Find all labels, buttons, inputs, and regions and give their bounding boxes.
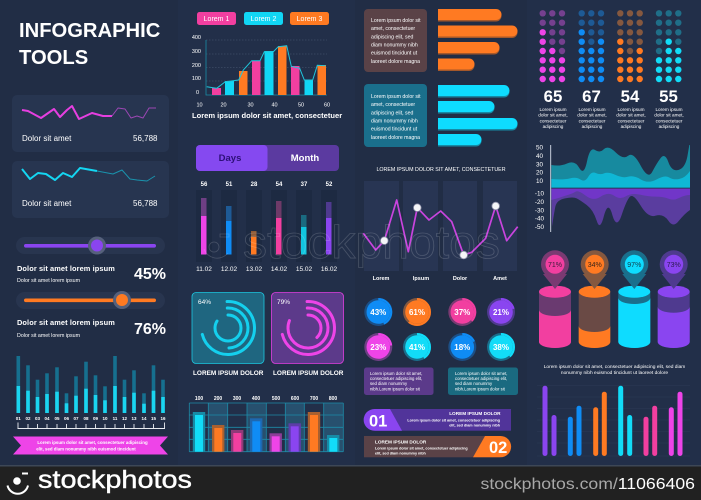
text box: brown: Lorem ipsum dolor sit [371, 18, 421, 24]
circle: 61%: 61% [409, 308, 425, 317]
statistic captions: adipiscing [659, 124, 680, 129]
chart: column chart with line [192, 35, 342, 120]
banner: 02 [364, 436, 511, 457]
chart: grid bar chart: 400 [252, 396, 260, 402]
cylinder: pink 71% [539, 250, 571, 348]
chart: grid bar chart: 600 [291, 396, 299, 402]
chart: daily progress bars: 16.02 [321, 266, 338, 273]
icon: stock logo [8, 472, 28, 494]
chart: mirrored stream areas: 20 [536, 170, 543, 176]
chart: cyan stacked bars: 07 [73, 416, 79, 421]
slider: purple 45%: Dolor sit amet lorem ipsum [17, 278, 81, 284]
circle: 21%: 21% [493, 308, 509, 317]
statistic numbers: 54 [621, 87, 640, 106]
chart: grid bar chart: 800 [329, 396, 337, 402]
panel: magenta sparkline card: 56,788 [133, 134, 158, 143]
chart: mirrored stream areas: -20 [535, 199, 544, 206]
panel: cyan sparkline card: 56,788 [133, 199, 158, 208]
chart: cyan stacked bars [16, 356, 166, 428]
chart: mirrored stream areas: 30 [536, 162, 543, 168]
statistic captions: dolor sit amet, [538, 113, 568, 118]
statistic captions: consectetuer [540, 118, 567, 123]
percentage circles [364, 298, 515, 361]
panel: cyan radial chart [192, 292, 264, 364]
chart: cyan stacked bars: 05 [54, 416, 60, 421]
chart: magenta line over columns: Ipsum [413, 276, 429, 282]
panel: magenta radial chart: 79% [277, 299, 290, 306]
statistic captions: Lorem ipsum [578, 107, 606, 112]
chart: column chart with line: Lorem ipsum dolor sit amet, consectetuer [192, 111, 342, 120]
statistic captions: Lorem ipsum [617, 107, 645, 112]
chart: column chart with line: 30 [247, 102, 254, 108]
banner: 01: Lorem ipsum dolor sit amet, consectetuer adipiscing [407, 418, 500, 422]
chart: mirrored stream areas [535, 144, 690, 232]
chart: mirrored stream areas: 10 [536, 178, 543, 185]
statistic captions: Lorem ipsum [539, 107, 567, 112]
tabs: days and month: Month [291, 153, 319, 164]
chart: cyan stacked bars: 06 [64, 416, 69, 421]
chart: paired vertical bars [537, 386, 690, 456]
dot matrix: orange 54 [617, 10, 643, 82]
cylinder: purple 73%: 73% [667, 262, 681, 269]
tabs: days and month: Days [219, 153, 241, 164]
title: TOOLS [19, 47, 88, 69]
text box: purple: sed diam nonummy [370, 381, 408, 386]
chart: daily progress bars: 11.02 [196, 266, 212, 273]
chart: column chart with line: 20 [220, 102, 227, 108]
circle: 43%: 43% [370, 308, 386, 317]
title [19, 20, 161, 69]
paragraph: Lorem ipsum dolor sit amet, consectetuer adipiscing elit, sed diam [544, 364, 685, 370]
footer bar: stockphotos [38, 466, 192, 494]
chart: daily progress bars [196, 182, 338, 273]
circle: 21% [487, 298, 515, 326]
text box: teal: euismod tincidunt ut [371, 126, 418, 132]
text box: purple [364, 368, 434, 395]
tabs: days and month [196, 145, 339, 171]
statistic captions: Lorem ipsum [655, 107, 683, 112]
chart: cyan stacked bars: 15 [151, 416, 156, 421]
panel: magenta sparkline card [12, 95, 169, 152]
chart: cyan stacked bars: 11 [113, 416, 118, 421]
chart: mirrored stream areas: 40 [536, 153, 543, 160]
circle: 18%: 18% [454, 343, 470, 352]
banner: 02: 02 [489, 439, 507, 457]
circle: 41% [403, 333, 431, 361]
banner: 01: elit, sed diam nonummy nibh [449, 423, 501, 427]
ribbon banner: elit, sed diam nonummy nibh euismod tincidunt [36, 446, 136, 452]
panel: cyan sparkline card [12, 161, 169, 218]
heading: line chart: LOREM IPSUM DOLOR SIT AMET, CONSECTETUER [376, 167, 506, 173]
text box: teal: Lorem ipsum dolor sit [371, 94, 421, 100]
legend buttons: Lorem 3 [297, 16, 322, 23]
cylinder: orange 34% [579, 250, 610, 348]
circle: 37%: 37% [454, 308, 470, 317]
dot matrix: cyan 55 [656, 10, 682, 82]
slider: purple 45%: 45% [134, 266, 166, 283]
text box: teal note: nibh.Lorem ipsum dolor sit [455, 386, 506, 391]
bars: orange horizontal [438, 9, 518, 71]
slider: orange 76%: 76% [134, 321, 166, 338]
chart: magenta line over columns: Dolor [453, 276, 468, 282]
chart: grid bar chart: 200 [214, 396, 222, 402]
slider: purple 45% [16, 236, 166, 284]
paragraph [544, 364, 685, 376]
chart: column chart with line: 40 [271, 102, 278, 108]
chart: cyan stacked bars: 01 [16, 416, 21, 421]
footer bar [0, 465, 701, 500]
chart: mirrored stream areas: -40 [535, 216, 544, 222]
bars: cyan horizontal [438, 85, 518, 146]
ribbon banner [13, 436, 168, 454]
chart: magenta line over columns: Amet [493, 276, 507, 282]
legend buttons: Lorem 2 [251, 16, 276, 23]
chart: cyan stacked bars: 13 [131, 416, 137, 421]
statistic captions: consectetuer [656, 118, 683, 123]
magenta sparkline [22, 106, 156, 119]
title: INFOGRAPHIC [19, 20, 161, 42]
statistic captions: adipiscing [543, 124, 564, 129]
chart: magenta line over columns: Lorem [373, 276, 390, 282]
text box: brown: laoreet dolore magna [371, 59, 420, 65]
banner: 02: LOREM IPSUM DOLOR [375, 439, 427, 444]
circle: 23% [364, 333, 392, 361]
text box: brown [364, 9, 427, 72]
chart: cyan stacked bars: 04 [44, 416, 50, 421]
banner: 02: elit, sed diam nonummy nibh [375, 452, 427, 456]
text box: teal note: consectetuer adipiscing elit, [455, 376, 507, 381]
text box: teal note: sed diam nonummy [455, 381, 493, 386]
slider: orange 76% [16, 291, 166, 339]
circle: 37% [448, 298, 476, 326]
chart: grid bar chart: 300 [233, 396, 241, 402]
cylinder: cyan 97%: 97% [627, 262, 641, 269]
text box: brown: euismod tincidunt ut [371, 50, 418, 56]
cylinder: orange 34%: 34% [588, 262, 602, 269]
banner: 01 [364, 409, 511, 431]
chart: grid bar chart [189, 396, 343, 452]
slider: purple 45%: Dolor sit amet lorem ipsum [17, 264, 115, 273]
banner: 01: LOREM IPSUM DOLOR [449, 411, 501, 416]
text box: teal: diam nonummy nibh [371, 118, 418, 124]
statistic captions: adipiscing [621, 124, 642, 129]
statistic captions [538, 107, 684, 129]
chart: cyan stacked bars: 03 [35, 416, 40, 421]
footer bar: stockphotos.com/ 11066406 [480, 476, 695, 493]
chart: cyan stacked bars: 12 [122, 416, 127, 421]
statistic captions: dolor sit amet, [616, 113, 646, 118]
text box: purple: Lorem ipsum dolor sit amet, [370, 371, 422, 376]
dot matrix: magenta 65 [540, 10, 565, 82]
chart: mirrored stream areas: -10 [535, 190, 544, 198]
chart: column chart with line: 200 [192, 63, 201, 69]
chart: daily progress bars: 37 [301, 182, 308, 188]
statistic numbers: 67 [582, 87, 601, 106]
chart: cyan stacked bars: 02 [25, 416, 31, 421]
panel: magenta radial chart [272, 292, 344, 364]
ribbon banner: Lorem ipsum dolor sit amet, consectetuer adipiscing [37, 440, 148, 445]
chart: column chart with line: 10 [196, 102, 203, 108]
chart: grid bar chart: 500 [272, 396, 280, 402]
chart: daily progress bars: 15.02 [296, 266, 313, 273]
text box: teal note: Lorem ipsum dolor sit amet, [455, 371, 507, 376]
chart: column chart with line: 100 [192, 76, 201, 82]
slider: orange 76%: Dolor sit amet lorem ipsum [17, 333, 81, 339]
chart: cyan stacked bars: 14 [141, 416, 147, 421]
text box: purple: nibh.Lorem ipsum dolor sit [370, 386, 421, 391]
banner: 02: Lorem ipsum dolor sit amet, consectetuer adipiscing [375, 446, 468, 450]
cyan sparkline [22, 168, 155, 181]
text box: teal: amet, consectetuer [371, 102, 415, 108]
chart: mirrored stream areas: -30 [535, 208, 544, 214]
dot matrix: blue 67 [578, 10, 604, 82]
chart: daily progress bars: 54 [276, 182, 283, 188]
statistic captions: adipiscing [582, 124, 603, 129]
cylinder: cyan 97% [618, 250, 650, 348]
radial chart captions: LOREM IPSUM DOLOR [273, 370, 344, 377]
statistic captions: dolor sit amet, [577, 113, 607, 118]
circle: 41%: 41% [409, 343, 425, 352]
text box: teal: laoreet dolore magna [371, 135, 420, 141]
chart: column chart with line: 0 [196, 90, 199, 96]
chart: cyan stacked bars: 16 [160, 416, 166, 421]
text box: brown: amet, consectetuer [371, 26, 415, 32]
radial chart captions [193, 370, 344, 377]
statistic captions: consectetuer [618, 118, 645, 123]
chart: daily progress bars: 51 [226, 182, 233, 188]
watermark: outlined stockphotos: stockphotos [243, 216, 500, 268]
text box: brown: diam nonummy nibh [371, 42, 418, 48]
chart: daily progress bars: 56 [201, 182, 208, 188]
chart: daily progress bars: 13.02 [246, 266, 263, 273]
circle: 23%: 23% [370, 343, 386, 352]
statistic captions: dolor sit amet, [654, 113, 684, 118]
panel: magenta sparkline card: Dolor sit amet [22, 134, 72, 143]
text box: teal: adipiscing elit, sed [371, 110, 414, 116]
statistic numbers [544, 87, 678, 106]
circle: 38%: 38% [493, 343, 509, 352]
cylinder: purple 73% [658, 250, 690, 348]
banner: 01: 01 [369, 412, 387, 430]
chart: column chart with line: 50 [298, 102, 304, 108]
chart: daily progress bars: 28 [251, 182, 258, 188]
circle: 43% [364, 298, 392, 326]
statistic numbers: 55 [659, 87, 678, 106]
text box: brown: adipiscing elit, sed [371, 34, 414, 40]
legend buttons [197, 12, 329, 25]
chart: magenta line over columns [363, 181, 518, 282]
chart: column chart with line: 400 [192, 35, 201, 41]
statistic numbers: 65 [544, 87, 562, 106]
chart: daily progress bars: 14.02 [271, 266, 288, 273]
text box: teal [364, 84, 427, 147]
text box: teal note [448, 368, 518, 395]
chart: grid bar chart: 100 [195, 396, 203, 402]
chart: cyan stacked bars: 08 [83, 416, 89, 421]
chart: column chart with line: 60 [324, 102, 330, 108]
statistic captions: consectetuer [579, 118, 606, 123]
panel: cyan radial chart: 64% [198, 299, 211, 306]
paragraph: nonummy nibh euismod tincidunt ut laoreet dolore [561, 370, 668, 376]
slider: orange 76%: Dolor sit amet lorem ipsum [17, 318, 115, 327]
circle: 38% [487, 333, 515, 361]
legend buttons: Lorem 1 [204, 16, 229, 23]
chart: cyan stacked bars: 09 [93, 416, 98, 421]
circle: 18% [448, 333, 476, 361]
text box: purple: consectetuer adipiscing elit, [370, 376, 422, 381]
radial chart captions: LOREM IPSUM DOLOR [193, 370, 264, 377]
cylinder: pink 71%: 71% [548, 262, 562, 269]
chart: cyan stacked bars: 10 [102, 416, 108, 421]
circle: 61% [403, 298, 431, 326]
chart: daily progress bars: 52 [326, 182, 333, 188]
chart: daily progress bars: 12.02 [221, 266, 238, 273]
chart: mirrored stream areas: 50 [536, 144, 543, 152]
chart: column chart with line: 300 [192, 49, 201, 55]
chart: grid bar chart: 700 [310, 396, 318, 402]
panel: cyan sparkline card: Dolor sit amet [22, 199, 72, 208]
chart: mirrored stream areas: -50 [535, 224, 544, 231]
